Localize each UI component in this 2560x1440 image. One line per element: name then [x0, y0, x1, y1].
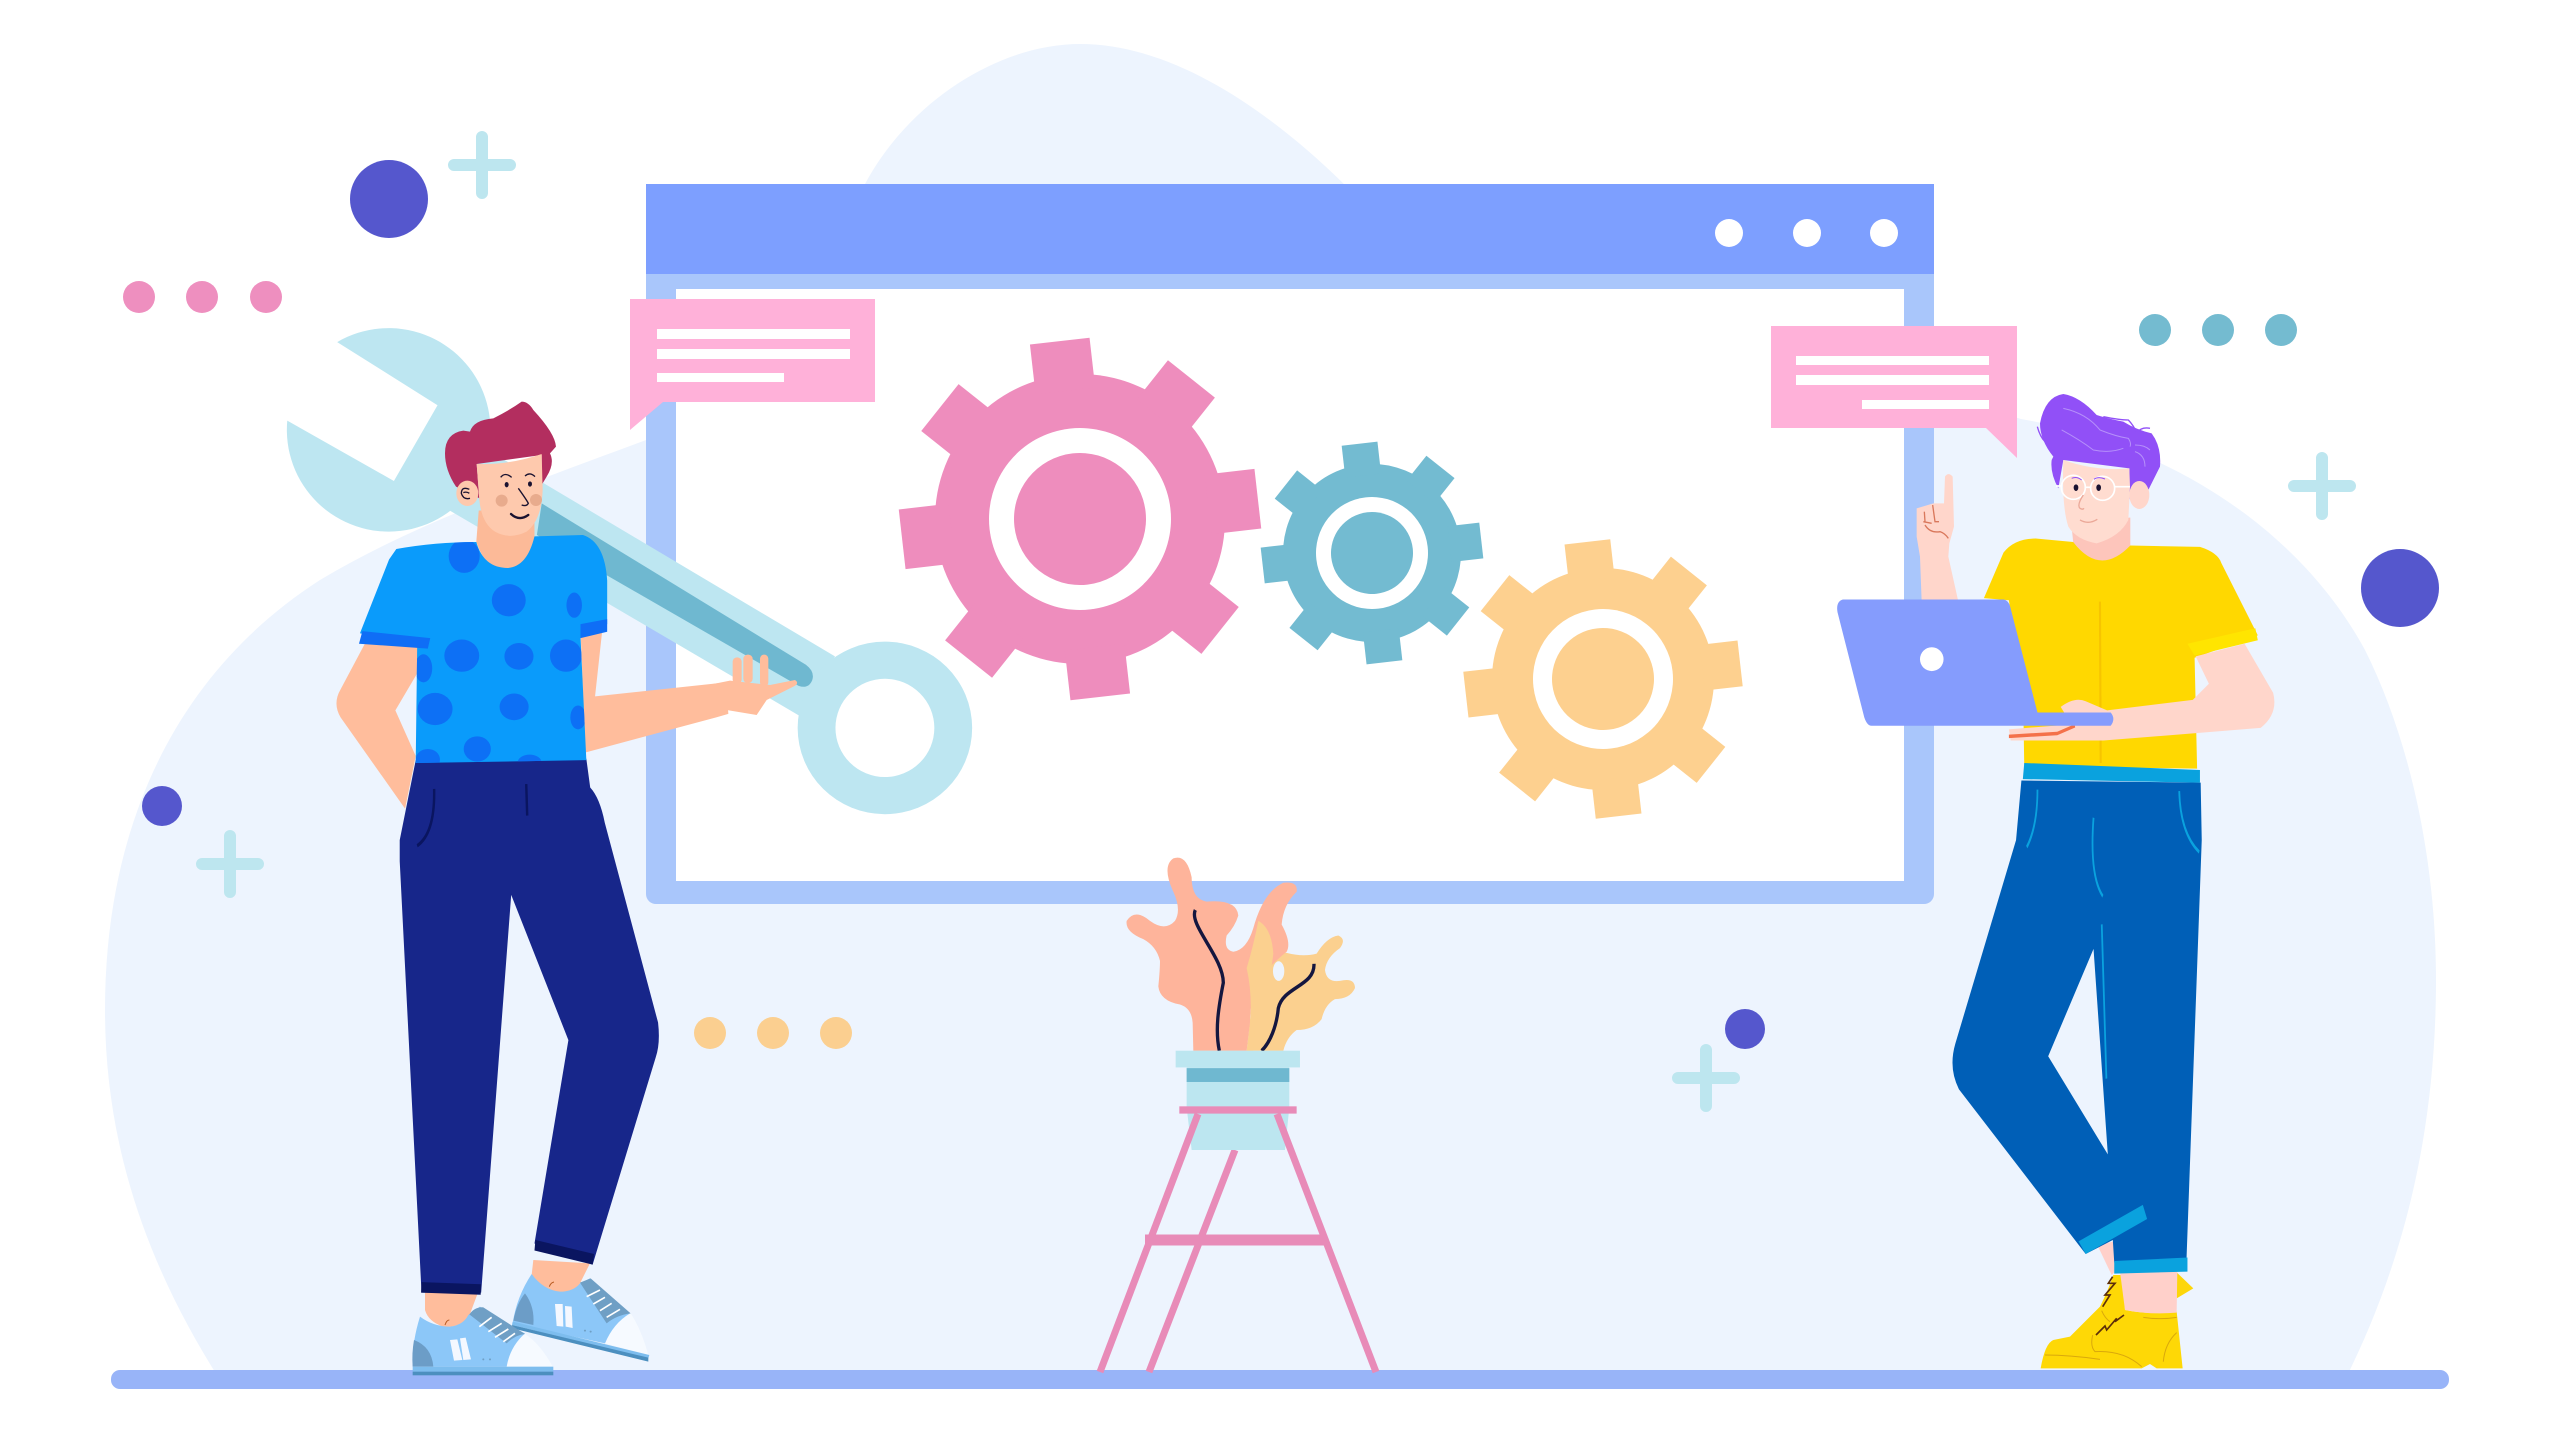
person with laptop	[1837, 517, 2274, 1274]
brows	[2072, 477, 2105, 480]
laptop lid and base	[1837, 600, 2113, 726]
ear	[2129, 481, 2149, 509]
small purple circle centre	[1725, 1009, 1765, 1049]
gap between leaves	[1273, 961, 1284, 981]
left person's hand	[700, 655, 797, 718]
bubble body	[1771, 326, 2017, 458]
heel patch	[513, 1293, 534, 1325]
yellow leaf	[1247, 919, 1355, 1051]
ankle skin	[2120, 1272, 2177, 1313]
laces	[469, 1307, 525, 1343]
pink gear	[882, 321, 1278, 717]
eyelets	[482, 1358, 491, 1360]
plus bottom centre	[1678, 1050, 1734, 1106]
purple circle right	[2361, 549, 2439, 627]
boot heel	[2177, 1272, 2193, 1298]
front shoe	[412, 1307, 553, 1375]
sole	[512, 1322, 649, 1358]
rear leg skin	[2097, 1242, 2115, 1275]
brows and nose	[501, 474, 535, 506]
pot lower body	[1187, 1107, 1289, 1150]
shirt spots	[415, 539, 586, 771]
bubble body	[630, 299, 875, 430]
pot rim	[1176, 1051, 1300, 1067]
boot details	[2045, 1311, 2177, 1367]
right person's raised hand	[1917, 474, 1958, 602]
large wrench	[287, 328, 972, 814]
upper	[513, 1274, 630, 1343]
hair highlights	[2062, 408, 2150, 467]
upper	[413, 1307, 525, 1367]
laptop logo	[1920, 647, 1944, 671]
trouser cuffs	[421, 1240, 594, 1295]
wrench ring hole	[835, 679, 934, 777]
orange gear	[1450, 526, 1756, 832]
pocket lines	[417, 784, 527, 846]
trouser seams	[2027, 790, 2199, 1079]
bubble text lines	[657, 329, 850, 382]
teal dots	[2139, 314, 2297, 346]
ankle mark	[445, 1320, 449, 1325]
wrench ring	[798, 642, 972, 814]
boot	[2041, 1275, 2183, 1368]
ear detail	[461, 488, 470, 499]
pink dots	[123, 281, 282, 313]
hair	[2040, 394, 2160, 500]
toe	[605, 1313, 648, 1355]
back shoe	[512, 1274, 649, 1362]
trousers	[400, 759, 659, 1293]
ankles	[425, 1260, 590, 1327]
bubble text lines	[1796, 356, 1989, 409]
window content area	[676, 289, 1904, 881]
wrench open jaw	[287, 328, 490, 532]
plus left	[202, 836, 258, 892]
nose and mouth	[2079, 495, 2097, 522]
cheeks	[496, 494, 542, 507]
peach leaf	[1127, 858, 1297, 1051]
stripes	[450, 1338, 471, 1361]
hand crease	[2009, 726, 2075, 736]
plus right	[2294, 458, 2350, 514]
wrench handle	[450, 442, 835, 717]
floor line	[111, 1370, 2449, 1389]
teal gear	[1250, 431, 1494, 675]
plant on stool	[1100, 858, 1376, 1372]
t-shirt	[360, 535, 607, 763]
sole	[413, 1367, 553, 1372]
right speech bubble	[1771, 326, 2017, 458]
stool top	[1179, 1106, 1297, 1114]
sleeve cuff	[2187, 628, 2258, 656]
forearm	[2009, 644, 2274, 741]
face	[2063, 460, 2130, 543]
window frame	[646, 184, 1934, 904]
neck	[2071, 517, 2130, 572]
pot body	[1187, 1067, 1289, 1107]
t-shirt	[1984, 539, 2258, 769]
right arm on hip	[336, 644, 418, 809]
mouth	[511, 514, 528, 518]
glasses	[2056, 475, 2130, 500]
title bar	[646, 184, 1934, 274]
stool middle leg	[1149, 1150, 1235, 1372]
eyes	[2074, 484, 2101, 491]
purple circle top left	[350, 160, 428, 238]
hand creases	[1923, 505, 1948, 538]
sleeve cuffs	[359, 619, 607, 649]
leaf veins	[1194, 910, 1314, 1051]
hand and pointing finger	[1917, 474, 1958, 602]
right person's head	[2037, 394, 2160, 543]
eyes	[505, 481, 532, 487]
stripes	[555, 1304, 573, 1328]
laptop	[1837, 600, 2113, 726]
left speech bubble	[630, 299, 875, 430]
browser window	[646, 184, 1934, 904]
stool legs and crossbar	[1100, 1114, 1376, 1372]
heel patch	[412, 1340, 433, 1367]
loose hair strands	[2037, 417, 2150, 442]
laces	[580, 1278, 631, 1323]
eyelets	[584, 1330, 592, 1333]
toe	[507, 1334, 553, 1368]
person with wrench	[336, 510, 728, 1295]
palm and thumb	[700, 680, 797, 718]
boot laces	[2096, 1277, 2124, 1335]
ankle mark	[549, 1282, 554, 1287]
hair	[445, 402, 556, 498]
pot band	[1187, 1068, 1289, 1082]
orange dots	[694, 1017, 852, 1049]
right person's boots	[2041, 1242, 2193, 1368]
extended arm	[581, 630, 728, 752]
trouser cuffs	[2079, 1205, 2187, 1274]
trousers	[1952, 781, 2202, 1262]
left person's head	[445, 402, 556, 536]
belt	[2023, 763, 2200, 783]
window buttons	[1715, 219, 1898, 247]
fingers	[733, 657, 742, 684]
plant scaled group	[1127, 858, 1355, 1150]
shirt seam	[2097, 602, 2104, 763]
face	[477, 454, 543, 536]
yellow leaf overlap	[1247, 921, 1273, 1051]
wrench groove	[537, 503, 813, 687]
small purple circle left	[142, 786, 182, 826]
decorative dots and plus signs	[123, 137, 2439, 1106]
neck	[476, 510, 534, 574]
ear	[456, 481, 478, 506]
plus top left	[454, 137, 510, 193]
left person's shoes	[412, 1260, 649, 1375]
